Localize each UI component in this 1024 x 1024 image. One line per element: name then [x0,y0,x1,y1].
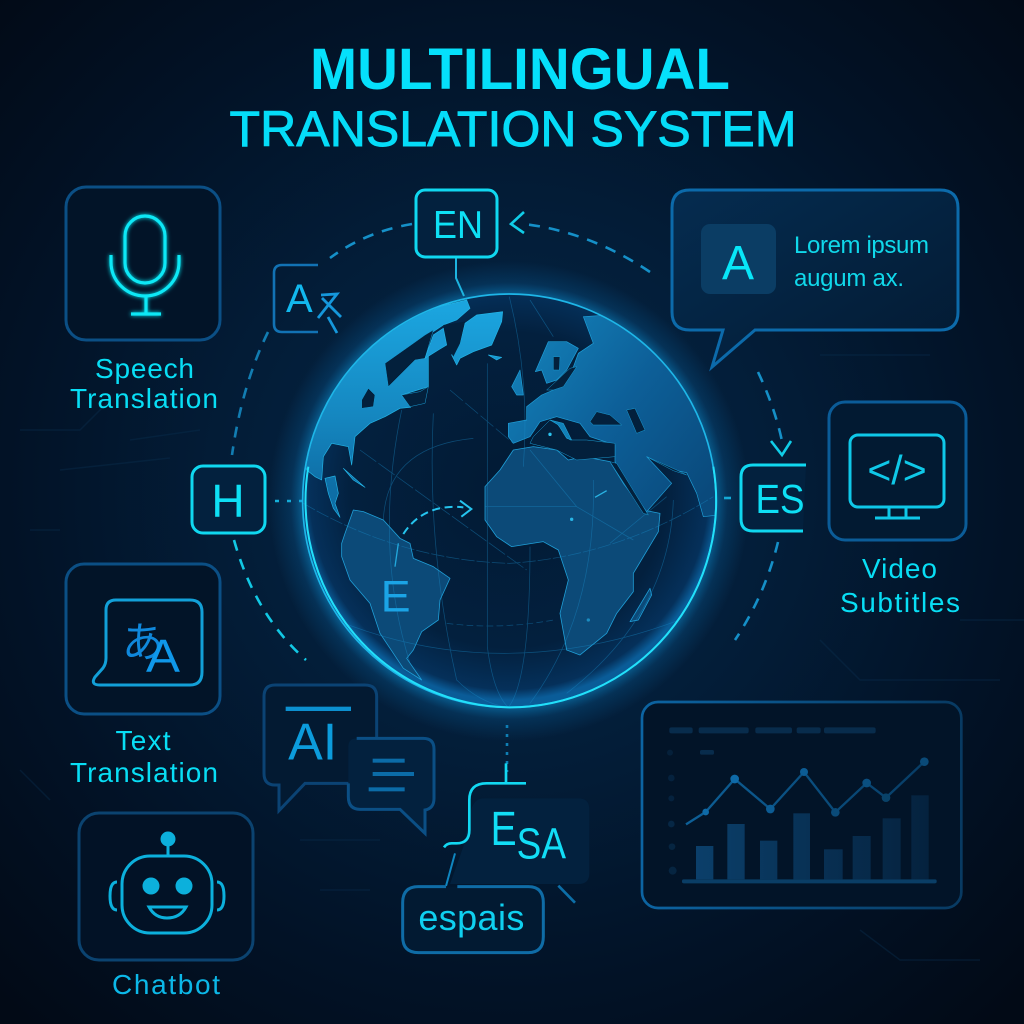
globe grid lines [303,297,713,707]
ESA bubble: SA [517,820,566,868]
lines bubble [348,738,434,833]
eurasia [508,313,733,517]
panel: chatbot: Chatbot [112,969,220,1000]
panel: text translation [66,564,220,788]
title: MULTILINGUAL [310,37,730,102]
bars [696,795,929,879]
icon: code monitor [850,435,944,518]
espais card: espais [418,897,524,938]
panel: speech translation: Speech [95,353,194,384]
globe arrow [403,501,471,534]
callout: lorem ipsum bubble: A [722,237,754,290]
EN language box: EN [433,204,483,247]
ES language box [741,465,806,531]
globe E label: E [381,573,411,622]
trend line [686,762,924,824]
icon: translate bubble [93,600,202,685]
panel: video subtitles: </> [867,447,927,493]
H language box: H [211,475,245,527]
title [230,37,796,157]
icon: microphone [111,216,179,314]
panel: chatbot [79,813,253,1000]
AI bubble: AI [288,713,337,771]
AI bubble [264,685,377,811]
arrowheads [511,212,791,455]
north america and greenland [300,300,503,517]
panel: text translation: Text [116,725,171,756]
panel: speech translation: Translation [70,383,218,414]
icon: translate bubble: A [146,630,180,682]
panel: video subtitles: Video [862,553,937,584]
panel: analytics chart [642,702,961,908]
ESA bubble: E [491,803,517,856]
dashed connector ring [232,224,783,772]
connector EN to globe [456,258,464,296]
ESA bubble [444,763,589,903]
AI chat bubbles and ESA cards [264,685,589,953]
title: TRANSLATION SYSTEM [230,101,796,157]
callout: lorem ipsum bubble: Lorem ipsum [794,232,929,259]
inland seas [362,322,687,515]
espais card [403,887,543,953]
icon: robot [110,833,224,933]
callout: lorem ipsum bubble: augum ax. [794,265,904,292]
panel: speech translation [66,187,220,414]
ES language box: ES [756,476,804,522]
globe [269,261,749,741]
panel: video subtitles [829,402,966,618]
icon: translate bubble: あ [122,619,164,666]
translate glyph box [274,265,341,333]
south america and africa [342,447,660,680]
panel: text translation: Translation [70,757,218,788]
callout: lorem ipsum bubble [672,190,958,367]
H language box [192,466,265,533]
translate glyph box: A [286,277,313,321]
rim [303,294,716,707]
EN language box [416,190,497,257]
panel: video subtitles: Subtitles [840,587,960,618]
